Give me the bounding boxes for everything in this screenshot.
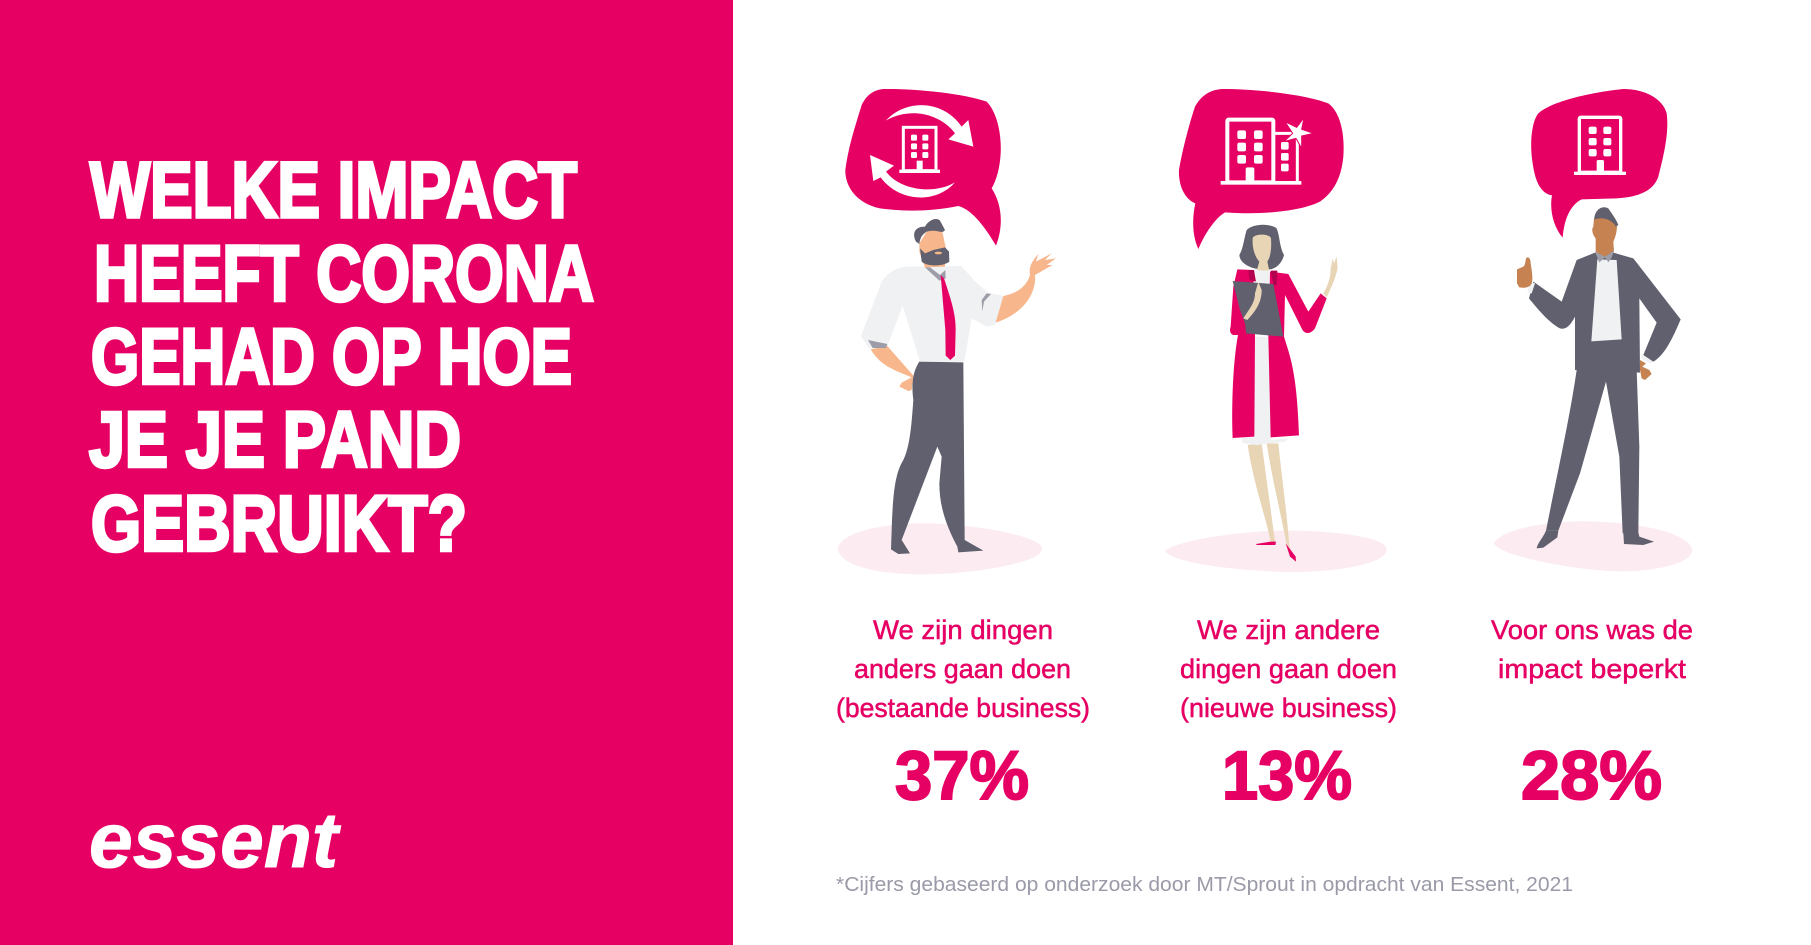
title	[89, 145, 594, 568]
shadow under man	[838, 523, 1042, 574]
figure: woman with clipboard	[1230, 225, 1338, 562]
label 3: Voor ons was de	[1491, 615, 1693, 645]
label 2: (nieuwe business)	[1180, 693, 1397, 723]
panel: left pink background	[0, 0, 733, 945]
label 1: anders gaan doen	[854, 654, 1071, 684]
label 2: We zijn andere	[1197, 615, 1380, 645]
logo: essent: essent	[89, 796, 341, 884]
label 2	[1180, 615, 1397, 723]
speech bubble with rotating building icon	[845, 89, 1001, 246]
title: JE JE PAND	[89, 394, 461, 484]
label 2: dingen gaan doen	[1180, 654, 1397, 684]
shadow under woman	[1165, 531, 1387, 572]
speech bubble with new building icon	[1179, 89, 1344, 249]
label 1: We zijn dingen	[873, 615, 1053, 645]
speech bubble with building icon	[1531, 89, 1667, 238]
label 1: (bestaande business)	[836, 693, 1090, 723]
value 28%: 28%	[1521, 737, 1662, 814]
figure: man in suit with thumbs up	[1517, 207, 1681, 548]
figure: bearded man in shirt and tie	[861, 219, 1056, 554]
label 1	[836, 615, 1090, 723]
value 13%: 13%	[1222, 737, 1352, 814]
title: HEEFT CORONA	[94, 228, 594, 318]
value 37%: 37%	[895, 737, 1029, 814]
title: WELKE IMPACT	[90, 145, 577, 234]
title: GEHAD OP HOE	[91, 312, 572, 400]
label 3	[1491, 615, 1693, 684]
title: GEBRUIKT?	[91, 478, 467, 568]
label 3: impact beperkt	[1498, 654, 1687, 684]
shadow under man in suit	[1494, 521, 1692, 571]
column 2: nieuwe business	[1165, 89, 1397, 814]
column 3: beperkte impact	[1491, 89, 1693, 814]
column 1: bestaande business	[836, 89, 1090, 814]
footnote: *Cijfers gebaseerd op onderzoek door MT/Sprout in opdracht van Essent, 2021	[836, 874, 1573, 896]
